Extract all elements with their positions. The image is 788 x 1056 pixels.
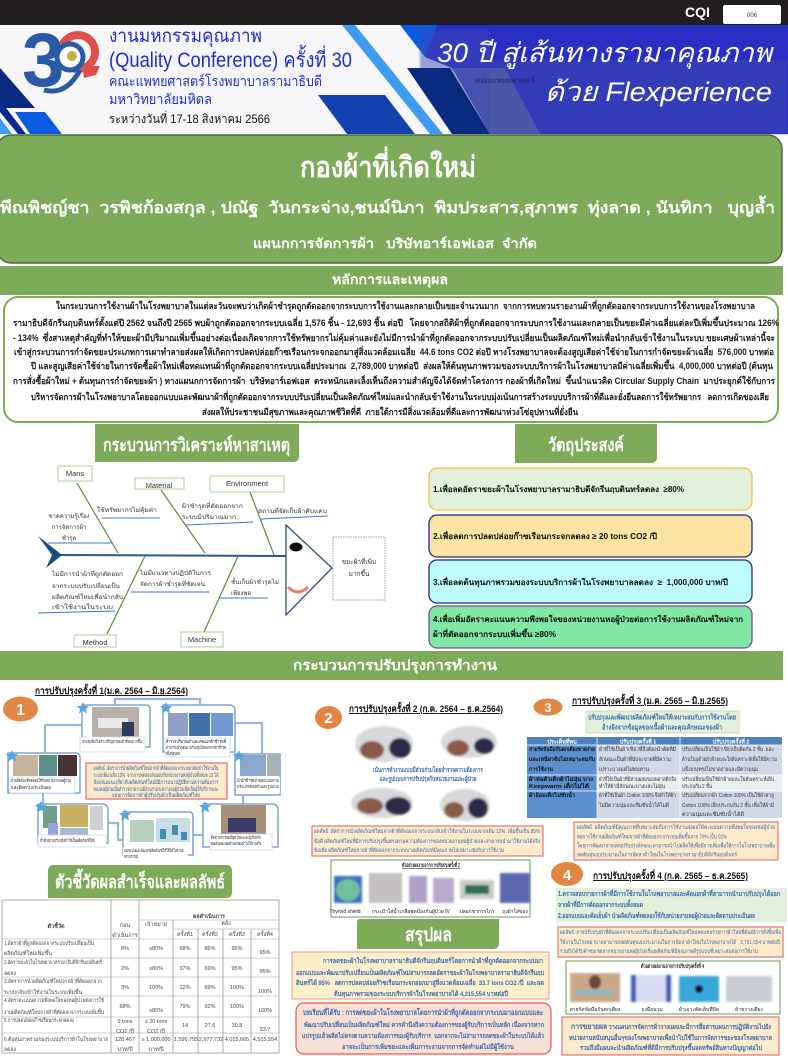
meeting caption: เน้นการทำงานแบบมีส่วนร่วมโดยสำรวจความต้องการ	[373, 765, 483, 774]
indicators table	[2, 900, 279, 1053]
objectives list	[429, 468, 752, 648]
indicators table: 3.อัตราการนำผลิตภัณฑ์ใหม่จากผ้าที่ตัดออกจาก	[4, 977, 102, 985]
label: Machine	[181, 632, 223, 647]
main title: กองผ้าที่เกิดใหม่	[300, 146, 476, 184]
comparison table: ผ้าที่ใช้เป็นผ้าเขียวที่ถึงต้องนำตัดที่มี	[599, 745, 676, 753]
indicators table: 79%	[179, 1004, 191, 1010]
step card 5	[35, 801, 108, 847]
comparison table: เปราะบางแต่ไม่ทนทาน	[599, 766, 649, 773]
indicators table: 14	[182, 1023, 188, 1029]
indicators table: ตัวชี้วัด	[47, 921, 65, 930]
indicators table: 69%	[204, 966, 216, 972]
cause notes: ไม่มีแนวทางปฏิบัติในการ	[139, 569, 212, 577]
comparison table: Cotton 100% เย็บประกบกัน 2 ชั้น เพื่อให้ผ้ามี	[682, 801, 774, 809]
actions note: จากผ้าที่มีการตัดออกจากระบบทั้งหมด	[558, 898, 643, 909]
comparison table: ผ้าที่ใช้เป็นผ้าที่มีส่วนผสมของพลาสติกจึง	[599, 775, 676, 783]
cause notes: จัดการผ้าชำรุดที่ชัดเจน	[140, 580, 205, 588]
product samples round 4: สายรัดข้อมือกันตกเตียง	[570, 1006, 621, 1013]
indicators table: ≥ 20 tons	[145, 1019, 168, 1025]
result callout: ผลลัพธ์ :อัตราการนำผลิตภัณฑ์ใหม่จากผ้าที่ตัดออกจากระบบกลับเข้าใช้งานใน	[94, 764, 219, 772]
indicators table: งานผลิตภัณฑ์ใหม่จากผ้าที่ตัดออกจากระบบเพิ่มขึ้น	[4, 1008, 104, 1016]
indicators table: 100%	[258, 1008, 272, 1014]
product samples round 2: ถุงผ้าใส่ของ	[502, 908, 528, 915]
indicators table: 95%	[231, 966, 243, 972]
number badge 4: 4	[563, 867, 572, 884]
meeting caption: และรูปแบบการปรับปรุงกับหน่วยงานและผู้ป่วย	[380, 774, 477, 784]
indicators table: 86%	[204, 946, 216, 952]
comparison table: ผ้าอ้อมเด็กไม่ซับน้ำ	[529, 790, 575, 799]
section bar: improvement process: กระบวนการปรับปรุงการทำงาน	[293, 657, 497, 674]
objective 2: 2.เพื่อลดการปลดปล่อยก๊าซเรือนกระจกลดลง ≥ 20 tons CO2 /ปี	[433, 530, 657, 541]
heading: cause analysis: กระบวนการวิเคราะห์หาสาเหตุ	[103, 434, 290, 457]
indicators table: ลดลง	[4, 971, 16, 977]
effect box: มากขึ้น	[349, 569, 370, 578]
indicators table: 2,977,732	[199, 1037, 223, 1043]
cause notes: การจัดการผ้า	[52, 524, 86, 531]
conference title: มหาวิทยาลัยมหิดล	[109, 91, 212, 107]
comparison table: ผ้าที่ใช้เป็นผ้า Cotton 100% จึงทำให้ผ้า	[599, 791, 676, 799]
step card 6: สถานการณ์	[124, 853, 138, 859]
indicators table: 100%	[230, 1004, 244, 1010]
step card 4: ประเภทของผ้าและรูปแบบ	[237, 784, 279, 790]
label: Material: Material	[146, 481, 173, 490]
result callout	[312, 826, 543, 856]
indicators table: ครั้งที่3	[229, 930, 245, 938]
number badge 1: 1	[16, 702, 25, 719]
objective 2	[429, 515, 752, 557]
conference title	[109, 26, 352, 126]
indicators table: 5.การปลดปล่อยก๊าซเรือนกระจกลดลง	[4, 1017, 74, 1024]
cause notes: จากระบบปรับเปลี่ยนเป็น	[52, 581, 120, 590]
comparison table: ไม่มีความนุ่มและซึมซับน้ำได้ไม่ดี	[598, 801, 669, 809]
indicators table: เป้าหมาย	[145, 921, 167, 928]
indicators table: ดำเนินการ	[112, 932, 138, 939]
product samples round 2: กระเป๋าใส่น้ำเกลือ	[372, 906, 410, 915]
conference title: คณะแพทยศาสตร์โรงพยาบาลรามาธิบดี	[109, 73, 322, 89]
indicators table: 27.6	[205, 1023, 215, 1029]
label: Method	[74, 635, 116, 647]
objective 1: 1.เพื่อลดอัตราขยะผ้าในโรงพยาบาลรามาธิบดีจักรีนฤบดินทร์ลดลง ≥80%	[433, 483, 684, 494]
step card 7: ติดตามการลดปัญหาขยะและผู้เกี่ยวกับ	[211, 834, 261, 841]
label: Mans	[58, 466, 92, 481]
heading: การปรับปรุงครั้งที่ 3 (ม.ค. 2565 – มิ.ย.2565)	[572, 693, 728, 707]
product samples round 4: ตัวอย่างผลงานจากการปรับปรุงครั้งที่ 4	[641, 961, 705, 970]
objective 1	[429, 468, 752, 510]
comparison table: แข็งแรงทรงไม่ขาดง่ายและมีความนุ่ม	[682, 765, 758, 773]
cause notes: ระบบมีปริมาณมาก	[182, 513, 236, 521]
objective 3: 3.เพื่อลดต้นทุนภาพรวมของระบบบริการผ้าในโรงพยาบาลลดลง ≥ 1,000,000 บาท/ปี	[433, 576, 728, 588]
comparison table: ทำให้ผ้ามีลักษณะบางและไม่อุ่น	[599, 783, 665, 790]
indicators table: 4.อัตราคะแนนความพึงพอใจของหอผู้ป่วยต่อการใช้	[4, 997, 104, 1004]
result callout	[86, 763, 227, 799]
comparison table: ปรับปรุงครั้งที่ 2	[713, 736, 749, 746]
panel: rationale text: ส่งผลให้ประชาชนมีสุขภาพและคุณภาพชีวิตที่ดี ภายใต้การมีสิ่งแวดล้อมที่ดีและการพัฒนาห่วงโซ่อุปทานที่ยั่งยืน	[202, 405, 579, 418]
department: แผนกการจัดการผ้า บริษัทอาร์เอฟเอส จำกัด	[253, 236, 537, 251]
objective 3	[429, 560, 752, 603]
indicators table: บาท/ปี	[148, 1046, 164, 1053]
indicators table: 68%	[179, 946, 191, 952]
comparison table: ความนุ่มและซึมซับน้ำได้ดี	[682, 810, 744, 818]
indicators table: 2.อัตราขยะผ้าในโรงพยาบาลรามาธิบดีจักรีนฤบดินทร์	[4, 958, 102, 966]
heading: การปรับปรุงครั้งที่ 1(ม.ค. 2564 – มิ.ย.2564)	[35, 683, 188, 697]
indicators table: 100%	[258, 989, 272, 995]
result callout: ต่อการใช้งานผลิตภัณฑ์ใหม่จากผ้าที่ตัดออกจากระบบเพิ่มขึ้นจาก 79% เป็น 92%	[577, 832, 727, 840]
indicators table: 128,467	[115, 1037, 135, 1043]
indicators table: 6.ต้นทุนภาพรวมของระบบบริการผ้าในโรงพยาบาล	[4, 1035, 108, 1043]
result callout	[558, 927, 783, 957]
panel: rationale text	[4, 297, 779, 422]
heading: indicators	[48, 865, 232, 898]
result callout: ระบบเพิ่มเฉลี่ย 12% จากการทดลองส่งมอบกับหน่วยงานหอผู้ป่วยทั้งหมด 13 ได้	[94, 771, 219, 779]
comparison table: การใช้งาน	[529, 765, 553, 773]
indicators table: 4,015,665	[225, 1037, 249, 1043]
heading: cause analysis	[95, 424, 299, 462]
result callout: ของหอผู้ป่วยเมื่อสำรวจหาความมีส่วนร่วมระหว่างหอผู้ป่วยเพื่อเป็นผู้ให้บริการและ	[94, 785, 219, 793]
comparison table: ลักษณะเป็นผ้าที่นับจะขาดที่มีความ	[599, 755, 671, 763]
product samples round 4: ผ้าเจาะตัดเย็บที่ปิด	[679, 1005, 719, 1013]
number badge 2	[315, 706, 342, 729]
lessons learned: บทเรียนที่ได้รับ : การลดขยะผ้าในโรงพยาบาลโดยการนำผ้าที่ถูกตัดออกจากระบบมาออกแบบและ	[303, 1006, 543, 1018]
conclusion text: ดินทร์ได้ 95% ลดการปลดปล่อยก๊าซเรือนกระจกออกมาสู่สิ่งแวดล้อมเฉลี่ย 33.7 tons CO2 /ปี และลด	[296, 977, 544, 988]
number badge 3	[534, 698, 562, 716]
step card 2: สำรวจปริมาณผ้าและคัดแยกผ้าชำรุดที่	[166, 738, 226, 745]
section bar: rationale	[0, 266, 783, 295]
comparison table: ประกบกัน 2 ชั้น	[682, 782, 712, 790]
indicators table: 95%	[231, 946, 243, 952]
conclusion text: ต้นทุนภาพรวมของระบบบริการผ้าในโรงพยาบาลได้ 4,315,554 บาทต่อปี	[334, 989, 508, 998]
conference title: ระหว่างวันที่ 17-18 สิงหาคม 2566	[109, 110, 270, 126]
conclusion text: ออกแบบและพัฒนาปรับเปลี่ยนเป็นผลิตภัณฑ์ใหม่สามารถลดอัตราขยะผ้าในโรงพยาบาลรามาธิบดีจักรีนฤบ	[296, 967, 544, 977]
number badge 3: 3	[544, 700, 552, 715]
indicators table: ≥80%	[149, 1008, 163, 1014]
step card 1: ประชุมทีมวิเคราะห์ปัญหาขยะผ้าที่พบมากขึ้น	[82, 738, 142, 745]
conference theme: ด้วย Flexperience	[545, 77, 772, 107]
indicators table: 92%	[204, 1004, 216, 1010]
meeting caption	[373, 765, 483, 784]
heading: indicators: ตัวชี้วัดผลสำเร็จและผลลัพธ์	[55, 868, 225, 892]
comparison table: ประเด็นที่พบ	[547, 738, 577, 746]
step card 2: ทั้งหมด	[166, 750, 180, 756]
step card 2: สามารถนำกลับมาปรับปรุงได้ออกจากผ้าชำรุด	[166, 744, 226, 751]
authors: พีณพิชญ์ชา วรพิชก้องสกุล , ปณัฐ วันกระจ่าง,ชนม์นิภา พิมประสาร,สุภาพร ทุ่งลาด , นันทิกา บุญล้ำ	[0, 195, 775, 218]
section bar: improvement process	[0, 651, 783, 680]
banner: คณะแพทยศาสตร์	[475, 75, 536, 85]
product samples round 2: ปลอกขากรรไกร	[459, 908, 495, 915]
conference title: (Quality Conference) ครั้งที่ 30	[109, 45, 352, 72]
indicators table: ≥ 1,000,000	[141, 1037, 171, 1043]
indicators table: ก่อน	[120, 923, 130, 929]
step card 5: ทำตัวอย่างปรับปรุงผ้าให้เป็นผลิตภัณฑ์ใหม่	[40, 836, 95, 844]
indicators table: ครั้งที่2	[202, 930, 218, 938]
step card 4: นำผ้าชำรุดมาออกแบบตาม	[237, 777, 279, 784]
comparison table: และเหนียวจับไม่เหมาะสมกับ	[529, 755, 595, 763]
lessons learned: พัฒนาปรับเปลี่ยนเป็นผลิตภัณฑ์ใหม่ ควรคำนึงถึงความต้องการของผู้รับบริการเป็นหลัก เนื่องจากหาก	[304, 1019, 544, 1030]
label: Environment: Environment	[226, 479, 269, 488]
cause notes: ขาดความรู้เรื่อง	[48, 512, 90, 520]
top bar: CQI	[685, 4, 710, 20]
panel: improvement round 4	[551, 862, 787, 1055]
number badge 4	[551, 862, 583, 886]
top bar: 006	[747, 13, 758, 19]
expansion note: รวมถึงมีแผนจะนำผลิตภัณฑ์ที่ดีมีการปรับปรุงขึ้นจดทรัพย์สินทางปัญญาต่อไป	[580, 1042, 762, 1052]
cause notes: ผลิตภัณฑ์ใหม่เพื่อนำกลับ	[52, 593, 123, 601]
indicators table: 33.7	[260, 1027, 270, 1033]
step card 3	[6, 750, 80, 793]
indicators table: บาท/ปี	[117, 1046, 133, 1053]
conference title: งานมหกรรมคุณภาพ	[109, 26, 262, 48]
number badge 1	[3, 696, 38, 722]
indicators table: ≥80%	[149, 966, 163, 972]
effect box: ขยะผ้าที่เพิ่ม	[342, 557, 376, 566]
cause notes: ผ้าชำรุดที่ตัดออกจาก	[182, 502, 243, 510]
objective 4: 4.เพื่อเพิ่มอัตราคะแนนความพึงพอใจของหน่วยงานหอผู้ป่วยต่อการใช้งานผลิตภัณฑ์ใหม่จาก	[433, 613, 743, 625]
photos: meetings	[351, 726, 497, 821]
step card 3: นำผลิตภัณฑ์ทดลองใช้กับหน่วยงานหอผู้ป่วย	[11, 777, 71, 784]
expansion note	[562, 1017, 779, 1055]
conclusion text: การลดขยะผ้าในโรงพยาบาลรามาธิบดีจักรีนฤบดินทร์โดยการนำผ้าที่ถูกตัดออกจากระบบมา	[323, 955, 543, 966]
indicators table: 3%	[121, 985, 129, 991]
heading: การปรับปรุงครั้งที่ 2 (ก.ค. 2564 – ธ.ค.2564)	[349, 701, 503, 715]
product samples round 2: Thyroid shield	[329, 909, 361, 915]
lessons learned	[296, 1003, 551, 1054]
heading: conclusion	[357, 919, 499, 949]
result callout: ข้อดี ผลิตภัณฑ์ใหม่ที่มีการปรับปรุงขึ้นตรงตามความต้องการของหน่วยงานหอผู้ป่วยและสามารถนำมาใช้งานได้จริง	[314, 837, 540, 845]
panel: improvement round 2	[312, 701, 543, 917]
indicators table: ผลิตภัณฑ์ใหม่เพิ่มขึ้น	[4, 949, 52, 957]
indicators table: 95%	[259, 969, 271, 975]
cause notes: ใช้ทรัพยากรไม่คุ้มค่า	[97, 506, 157, 514]
comparison table: Keepwarm เด็กไม่ได้	[529, 782, 590, 790]
cause notes	[48, 502, 327, 611]
effect box	[333, 537, 385, 600]
label: Material	[135, 478, 184, 490]
step card 2	[160, 702, 235, 757]
heading: objectives: วัตถุประสงค์	[548, 434, 624, 457]
indicators table: 89%	[204, 985, 216, 991]
indicators table: ครั้งที่4	[257, 930, 273, 938]
indicators table: CO2 /ปี	[116, 1028, 134, 1035]
label: Machine: Machine	[188, 635, 216, 644]
result callout: ข้อเสีย ผลิตภัณฑ์ใหม่จากผ้าที่ตัดออกจากระบบบางผลิตภัณฑ์มีคุณภาพไม่เหมาะสมกับการใช้งาน	[314, 846, 504, 854]
goal note: ปรับปรุงและพัฒนาผลิตภัณฑ์ใหม่ให้เหมาะสมกับการใช้งานโดย	[588, 712, 736, 722]
fishbone diagram	[38, 466, 385, 647]
indicators table: 12%	[179, 985, 191, 991]
heading: การปรับปรุงครั้งที่ 4 (ก.ค. 2565 – ธ.ค.2565)	[593, 868, 748, 882]
top bar	[0, 0, 788, 25]
indicators table: 1,596,755	[174, 1037, 198, 1043]
heading: objectives	[515, 424, 657, 463]
step card 6	[119, 809, 193, 861]
indicators table: 4,515,554	[253, 1037, 277, 1043]
icon: fish head	[286, 525, 332, 615]
indicators table: 9 tons	[118, 1019, 133, 1025]
lessons learned: อาจจะเป็นการเพิ่มขยะและเพิ่มภาระงานจากการจัดทำแต่ไม่มีผู้ใช้งาน	[342, 1041, 514, 1052]
section bar: rationale: หลักการและเหตุผล	[332, 272, 448, 288]
indicators table: 2%	[121, 966, 129, 972]
indicators table: ครั้งที่1	[177, 930, 193, 938]
indicators table: 100%	[230, 985, 244, 991]
indicators table: 30.8	[232, 1023, 242, 1029]
cause notes: เข้าใช้งานในระบบ	[52, 603, 113, 611]
logo: 30 years	[22, 18, 100, 103]
number badge 2: 2	[324, 710, 333, 727]
result callout: ลดต้นทุนงบประมาณในการจัดหาผ้าใหม่ในโรงพยาบาลรามาธิบดีจักรีนฤบดินทร์	[577, 850, 737, 858]
product samples round 4: ถุงมือนวม	[641, 1006, 663, 1013]
indicators table: ≥80%	[149, 946, 163, 952]
step card 7: คุณลักษณะของตัวเองก่อนนำไปใช้งานจริง	[211, 840, 261, 847]
panel: improvement round 1	[3, 683, 280, 861]
step card 6: ออกแบบและพัฒนาผลิตภัณฑ์ให้ใช้ได้ในระบบ	[124, 847, 184, 853]
result callout: ผลลัพธ์ :อัตราการนำผลิตภัณฑ์ใหม่จากผ้าที่ตัดออกจากระบบกลับเข้าใช้งานในระบบจากเดิม 12% เพิ่มขึ้นเป็น 85%	[314, 827, 540, 835]
conference theme: 30 ปี สู่เส้นทางรามาคุณภาพ	[437, 38, 774, 70]
result callout: ข้อเสนอแนะเกี่ยวกับผลิตภัณฑ์ใหม่มีมีการแนวปฏิบัติตามความต้องการ	[94, 778, 219, 786]
comparison table: ผ้าห่อตัวเด็กผ้าไม่อุ่น บาง	[529, 775, 593, 783]
label: Environment	[210, 476, 284, 492]
cause notes: ไม่มีการนำผ้าที่ถูกตัดออก	[51, 570, 123, 578]
indicators table: 68%	[119, 1004, 131, 1010]
label: Mans: Mans	[66, 469, 84, 478]
product samples round 2: ตัวอย่างผลงานจากการปรับปรุงครั้งที่ 2	[402, 860, 460, 869]
step card 3: และติดตามประเมินผล	[11, 785, 51, 790]
objective 4: ผ้าที่ตัดออกจากระบบเพิ่มขึ้น ≥80%	[433, 628, 556, 639]
product samples round 2: ชุดป้องกันผู้ป่วย IV	[410, 908, 450, 915]
step card 4	[233, 750, 280, 795]
comparison table	[527, 736, 782, 818]
title panel	[0, 135, 782, 263]
step card 7	[199, 801, 278, 850]
logo: 30 years: 3	[22, 18, 64, 103]
product samples round 4: ผ้าขวางเตียง	[735, 1006, 763, 1013]
result callout	[574, 822, 778, 860]
comparison table: ปรับเปลี่ยนเป็นใช้ผ้าฝ้ายและใยสังเคราะห์เย็บ	[682, 775, 774, 783]
panel: improvement round 3	[527, 693, 782, 860]
indicators table: 37%	[179, 966, 191, 972]
indicators table: ผลดำเนินการ	[193, 913, 225, 920]
icon: fish tail	[38, 536, 62, 568]
comparison table: ปรับเปลี่ยนเป็นใช้ผ้าเขียวเย็บติดกัน 2 ชั้น และ	[682, 745, 774, 753]
indicators table: 8%	[121, 946, 129, 952]
conclusion text	[292, 952, 549, 999]
cause notes: เพียงพอ	[231, 589, 251, 597]
objective 4	[429, 606, 752, 648]
indicators table: หลัง	[221, 920, 231, 927]
indicators table: 95%	[259, 950, 271, 956]
goal note: อ้างอิงจากข้อมูลของเนื้อผ้าและคุณลักษณะของผ้า	[602, 722, 722, 732]
conference theme	[437, 38, 774, 107]
product samples round 4	[566, 961, 780, 1014]
cause notes: ชั้นเก็บผ้าชำรุดไม่	[231, 576, 279, 586]
indicators table: ลดลง	[4, 1047, 16, 1053]
indicators table: ระบบกลับเข้าใช้งานในระบบเพิ่มขึ้น	[4, 988, 82, 996]
comparison table: สายรัดข้อมือกันตกเตียงขาดง่าย	[529, 745, 595, 753]
product samples round 2	[329, 860, 530, 917]
indicators table: 1.อัตราผ้าที่ถูกตัดออกจากระบบปรับเปลี่ยนเป็น	[4, 939, 94, 947]
cause notes: สถานที่จัดเก็บผ้าคับแคบ	[258, 506, 327, 515]
result callout: แผนการจัดการผ้าผู้ปรับปรุงผ้าเป็นผลิตภัณฑ์ใหม่	[112, 791, 200, 799]
comparison table: ปรับปรุงครั้งที่ 1	[620, 736, 656, 746]
cause notes: ชำรุด	[62, 535, 76, 542]
comparison table: ปรับเปลี่ยนจากผ้า Cotton 100% เป็นใช้ผ้าสาลู	[682, 791, 774, 799]
indicators table: CO2 /ปี	[147, 1028, 165, 1035]
banner	[0, 25, 788, 135]
indicators table: 100%	[149, 985, 163, 991]
heading: conclusion: สรุปผล	[405, 925, 452, 947]
lessons learned: แปรรูปแล้วผลิตไม่ตรงตามความต้องการของผู้รับบริการ นอกจากจะไม่สามารถลดขยะผ้าในระบบได้แล้ว	[302, 1031, 544, 1041]
goal note	[586, 711, 739, 733]
actions note	[556, 888, 787, 922]
label: Method: Method	[82, 638, 108, 647]
step card 1	[77, 702, 150, 752]
